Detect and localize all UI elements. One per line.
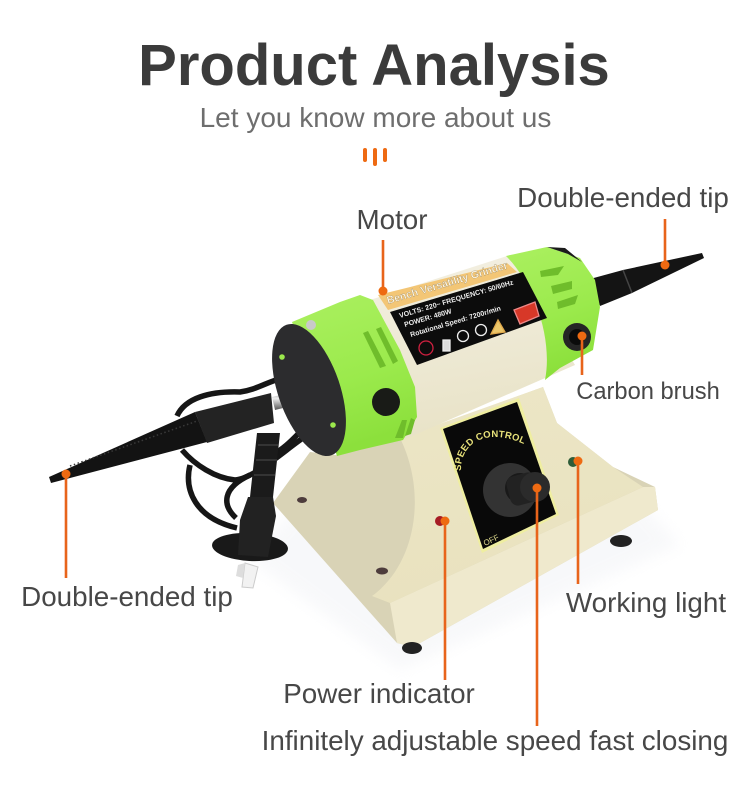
callout: motor bbox=[356, 204, 428, 296]
icon: orange tick marks bbox=[365, 150, 385, 164]
callout: carbon brush bbox=[576, 332, 720, 405]
right green collar bbox=[506, 247, 600, 380]
label heading: Bench Versatility Grinder bbox=[385, 260, 509, 307]
subtitle: Let you know more about us bbox=[200, 102, 551, 133]
callout: double-ended tip (right) bbox=[517, 182, 729, 270]
safety icons bbox=[419, 302, 539, 355]
left tip and shaft bbox=[49, 380, 335, 483]
power cord bbox=[177, 378, 303, 528]
speed control panel bbox=[440, 398, 559, 553]
callout: infinitely adjustable speed: Infinitely adjustable speed fast closing bbox=[262, 725, 728, 756]
label specs: POWER: 480W bbox=[404, 308, 453, 329]
panel off label: OFF bbox=[482, 533, 500, 548]
foot bbox=[402, 642, 422, 654]
callout: working light bbox=[566, 456, 726, 618]
cream cylinder bbox=[370, 255, 575, 440]
left motor cap bbox=[372, 388, 400, 416]
callout: power indicator bbox=[283, 516, 475, 709]
spec label bbox=[378, 260, 547, 365]
callout: motor: Motor bbox=[356, 204, 428, 235]
mounting holes bbox=[297, 497, 388, 574]
callout: power indicator: Power indicator bbox=[283, 678, 475, 709]
label specs bbox=[399, 279, 515, 339]
callout: carbon brush: Carbon brush bbox=[576, 379, 720, 405]
screw bbox=[306, 320, 316, 330]
callout: double-ended tip (left): Double-ended tip bbox=[21, 581, 233, 612]
base bbox=[273, 387, 658, 654]
label specs: Rotational Speed: 7200r/min bbox=[410, 305, 502, 339]
title: Product Analysis bbox=[138, 33, 610, 98]
side vent slots bbox=[363, 266, 578, 438]
callout: infinitely adjustable speed bbox=[262, 484, 728, 756]
power plug bbox=[211, 433, 289, 588]
end disc bbox=[257, 315, 361, 465]
left green collar bbox=[292, 295, 417, 456]
callout: working light: Working light bbox=[566, 587, 726, 618]
product: bench grinder bbox=[49, 247, 704, 654]
working led bbox=[568, 457, 578, 467]
speed dial bbox=[483, 463, 550, 517]
motor bbox=[257, 247, 600, 465]
ground shadow bbox=[250, 500, 680, 670]
power led bbox=[435, 516, 445, 526]
carbon brush cap bbox=[563, 323, 591, 351]
panel text: SPEED CONTROL bbox=[454, 430, 524, 471]
foot bbox=[610, 535, 632, 547]
right tip bbox=[590, 253, 704, 306]
label specs: VOLTS: 220~ FREQUENCY: 50/60Hz bbox=[399, 279, 515, 320]
callout: double-ended tip (right): Double-ended tip bbox=[517, 182, 729, 213]
callout: double-ended tip (left) bbox=[21, 470, 233, 612]
